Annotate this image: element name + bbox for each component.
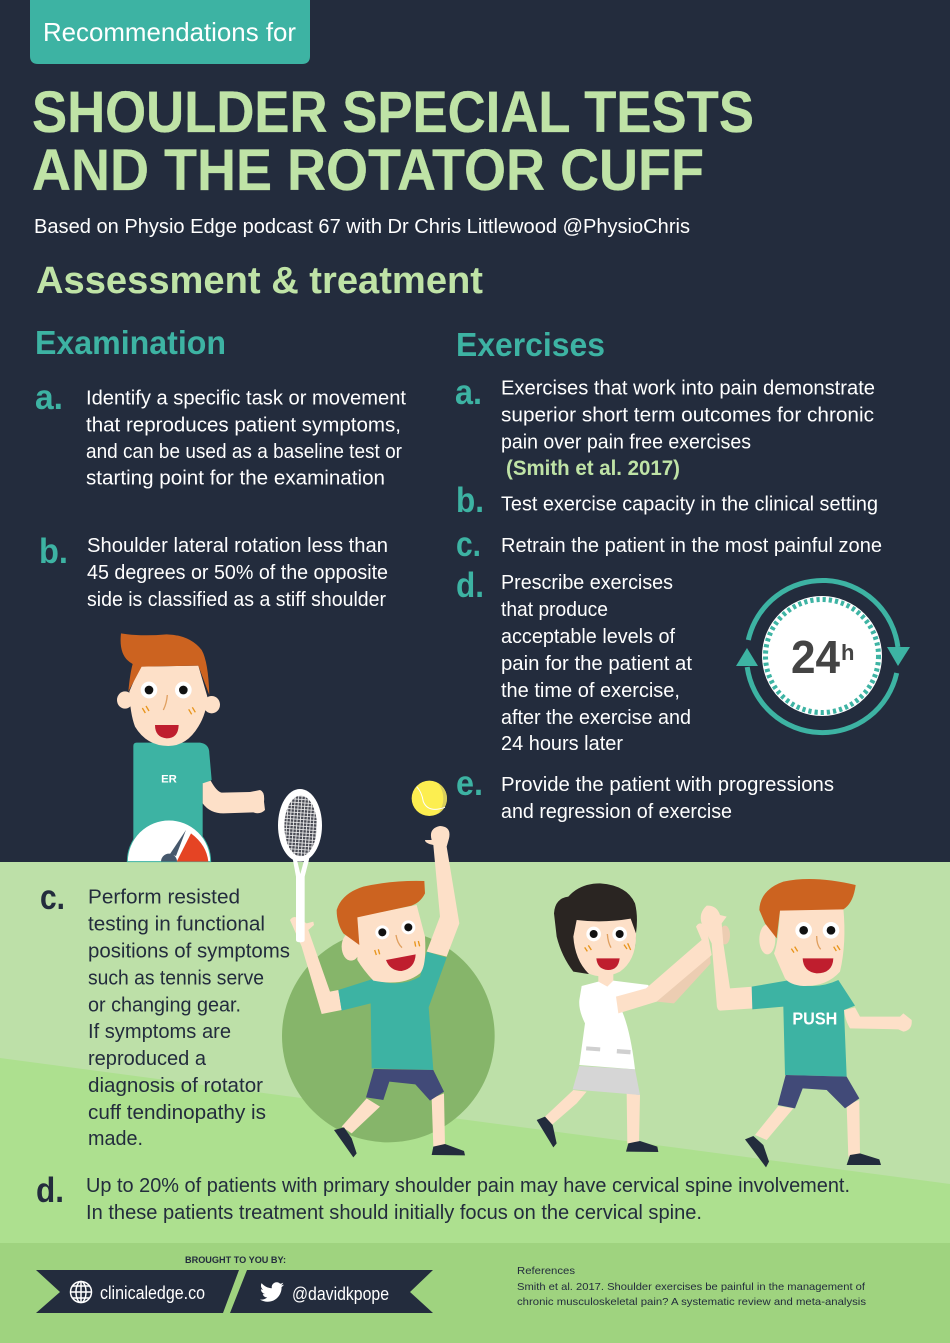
background: green ground slope <box>0 1058 950 1243</box>
title: SHOULDER SPECIAL TESTS <box>32 80 754 145</box>
examination item c: testing in functional <box>88 912 265 936</box>
heading: examination: Examination <box>35 324 226 361</box>
exercises item d: acceptable levels of <box>501 625 675 648</box>
exercises item e <box>456 764 834 823</box>
exercises item e: Provide the patient with progressions <box>501 773 834 796</box>
exercises item e: e. <box>456 764 483 803</box>
footer band <box>0 1243 950 1343</box>
title: AND THE ROTATOR CUFF <box>32 138 704 203</box>
examination item c: Perform resisted <box>88 886 240 908</box>
exercises item a <box>455 373 875 480</box>
exercises item b: b. <box>456 481 484 520</box>
exercises item e: and regression of exercise <box>501 800 732 823</box>
illustration: boy with ER shirt and gauge <box>117 633 265 862</box>
examination item b: b. <box>39 532 68 571</box>
examination item c: c. <box>40 878 65 917</box>
examination item c: such as tennis serve <box>88 966 264 990</box>
icon: 24 hour clock cycle: 24 <box>791 631 840 683</box>
examination item c: positions of symptoms <box>88 940 290 962</box>
examination item d: Up to 20% of patients with primary shoulder pain may have cervical spine involvement. <box>86 1174 850 1197</box>
exercises item d: d. <box>456 566 484 605</box>
examination item a <box>35 378 406 490</box>
background: light green panel <box>0 862 950 1243</box>
examination item b: 45 degrees or 50% of the opposite <box>87 561 388 584</box>
tab: recommendations for: Recommendations for <box>43 17 296 47</box>
exercises item c: c. <box>456 525 481 564</box>
patient in PUSH shirt: PUSH <box>792 1009 837 1029</box>
examination item d: In these patients treatment should initially focus on the cervical spine. <box>86 1201 702 1224</box>
icon: 24 hour clock cycle <box>736 580 910 733</box>
references: chronic musculoskeletal pain? A systematic review and meta-analysis <box>517 1296 866 1308</box>
subtitle: Based on Physio Edge podcast 67 with Dr Chris Littlewood @PhysioChris <box>34 215 690 238</box>
exercises item d: the time of exercise, <box>501 679 680 702</box>
examination item c: made. <box>88 1127 143 1150</box>
exercises item b <box>456 481 878 520</box>
footer label: brought to you by: BROUGHT TO YOU BY: <box>185 1255 286 1265</box>
icon: twitter bird <box>260 1282 284 1302</box>
icon: tennis racket <box>278 789 322 942</box>
examination item c: diagnosis of rotator <box>88 1074 263 1097</box>
ribbon: twitter: @davidkpope <box>292 1284 389 1304</box>
examination item a: a. <box>35 378 63 417</box>
ribbon: website <box>36 1270 239 1313</box>
illustration: tennis player with ball circle <box>278 781 495 1157</box>
exercises item c: Retrain the patient in the most painful zone <box>501 534 882 557</box>
examination item a: Identify a specific task or movement <box>86 386 406 410</box>
exercises item d: Prescribe exercises <box>501 571 673 594</box>
exercises item d <box>456 566 692 755</box>
exercises item a: (Smith et al. 2017) <box>506 457 680 480</box>
patient in PUSH shirt <box>701 879 912 1167</box>
heading: assessment and treatment: Assessment & treatment <box>36 260 483 302</box>
exercises item d: after the exercise and <box>501 706 691 729</box>
examination item a: starting point for the examination <box>86 466 385 490</box>
illustration: nurse and patient high five <box>537 879 912 1167</box>
title <box>32 80 754 203</box>
icon: globe <box>70 1282 92 1302</box>
tab: recommendations for <box>30 0 310 64</box>
examination item c <box>40 878 290 1150</box>
exercises item b: Test exercise capacity in the clinical setting <box>501 492 878 516</box>
exercises item d: pain for the patient at <box>501 652 692 675</box>
exercises item a: Exercises that work into pain demonstrate <box>501 376 875 400</box>
exercises item a: a. <box>455 373 482 412</box>
examination item b <box>39 532 388 611</box>
icon: tennis ball <box>412 781 447 816</box>
examination item d <box>36 1171 850 1224</box>
examination item c: cuff tendinopathy is <box>88 1101 266 1124</box>
examination item c: If symptoms are <box>88 1020 231 1043</box>
exercises item c <box>456 525 882 564</box>
exercises item a: superior short term outcomes for chronic <box>501 404 874 426</box>
examination item a: that reproduces patient symptoms, <box>86 414 401 436</box>
exercises item a: pain over pain free exercises <box>501 430 751 454</box>
examination item d: d. <box>36 1171 64 1210</box>
references: Smith et al. 2017. Shoulder exercises be painful in the management of <box>517 1281 865 1293</box>
examination item c: or changing gear. <box>88 994 241 1016</box>
ribbon: twitter <box>230 1270 433 1313</box>
icon: 24 hour clock cycle: h <box>841 640 854 665</box>
heading: exercises: Exercises <box>456 326 605 363</box>
examination item c: reproduced a <box>88 1047 207 1070</box>
examination item b: side is classified as a stiff shoulder <box>87 588 386 611</box>
examination item b: Shoulder lateral rotation less than <box>87 534 388 557</box>
examination item a: and can be used as a baseline test or <box>86 440 402 463</box>
references: References <box>517 1265 575 1277</box>
exercises item d: 24 hours later <box>501 732 623 755</box>
exercises item d: that produce <box>501 598 608 621</box>
ribbon: website: clinicaledge.co <box>100 1283 205 1303</box>
references <box>517 1265 866 1308</box>
illustration: boy with ER shirt and gauge: ER <box>161 774 177 786</box>
nurse <box>537 883 730 1152</box>
background: dark upper area <box>0 0 950 862</box>
